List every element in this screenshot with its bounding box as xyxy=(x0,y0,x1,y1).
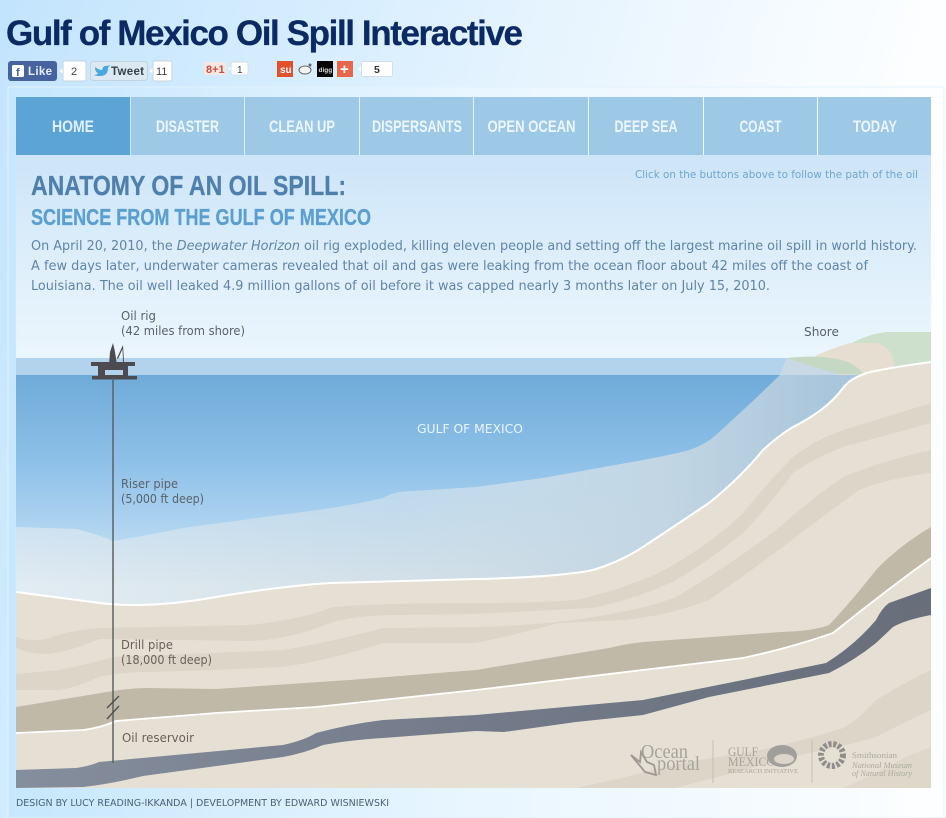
google plus button xyxy=(204,62,248,76)
google plus button: 1 xyxy=(237,65,243,76)
logo: ocean portal: portal xyxy=(657,753,700,775)
sharing icons and count: digg xyxy=(318,67,332,74)
footer credits: DESIGN BY LUCY READING-IKKANDA | DEVELOPMENT BY EDWARD WISNIEWSKI xyxy=(16,798,389,809)
intro sky panel xyxy=(16,155,931,360)
twitter tweet button: 11 xyxy=(156,66,167,78)
seafloor line xyxy=(16,362,931,605)
surface water band xyxy=(16,358,787,375)
oil reservoir layer xyxy=(16,588,931,788)
nav: disaster xyxy=(131,97,244,155)
nav: clean up xyxy=(245,97,359,155)
label: oil rig xyxy=(121,309,245,338)
bottom right sediment stratum xyxy=(843,747,931,788)
sharing icons and count: + xyxy=(340,61,349,78)
facebook like button: 2 xyxy=(71,66,77,78)
sharing icons and count xyxy=(277,61,392,78)
land: green spit xyxy=(787,357,864,375)
dark rock layer xyxy=(16,527,931,733)
facebook like button: Like xyxy=(28,66,52,78)
label: shore: Shore xyxy=(804,325,839,339)
intro paragraph: A few days later, underwater cameras revealed that oil and gas were leaking from the ocean floor about 42 miles off the coast of xyxy=(31,258,869,274)
logo: ocean portal xyxy=(631,741,700,775)
land: green hill xyxy=(850,332,931,372)
label: drill pipe xyxy=(121,638,212,667)
riser and drill pipe xyxy=(112,378,114,763)
logo: gulf of mexico research initiative xyxy=(728,745,798,775)
label: oil rig: (42 miles from shore) xyxy=(121,324,245,338)
intro paragraph: On April 20, 2010, the Deepwater Horizon oil rig exploded, killing eleven people and setting off the largest marine oil spill in world history. xyxy=(31,238,917,254)
pipe break marks xyxy=(107,696,119,719)
nav: home xyxy=(16,97,130,155)
nav: today: TODAY xyxy=(853,117,897,136)
subheading: SCIENCE FROM THE GULF OF MEXICO xyxy=(31,204,371,230)
continental shelf water overlay xyxy=(16,375,931,620)
nav: clean up: CLEAN UP xyxy=(269,117,335,136)
sharing icons and count: su xyxy=(280,65,292,76)
nav: today xyxy=(818,97,931,155)
label: oil reservoir: Oil reservoir xyxy=(122,731,194,745)
logo: gulf of mexico research initiative: MEXICO xyxy=(728,755,775,769)
upper sediment stratum xyxy=(16,403,931,654)
shelf water blue tint xyxy=(16,476,558,564)
nav: open ocean: OPEN OCEAN xyxy=(488,117,576,136)
logo: ocean portal: Ocean xyxy=(641,741,688,763)
instruction note: Click on the buttons above to follow the path of the oil xyxy=(635,169,918,181)
logo: gulf of mexico research initiative: GULF xyxy=(728,745,758,759)
label: riser pipe: Riser pipe xyxy=(121,477,178,491)
nav: coast xyxy=(704,97,817,155)
heading: anatomy of an oil spill: ANATOMY OF AN OIL SPILL: xyxy=(31,170,346,201)
title: Gulf of Mexico Oil Spill Interactive xyxy=(6,14,523,53)
logo: smithsonian: of Natural History xyxy=(852,768,912,778)
logo divider xyxy=(811,740,813,783)
nav: deep sea: DEEP SEA xyxy=(614,117,678,136)
nav: deep sea xyxy=(589,97,703,155)
nav: coast: COAST xyxy=(740,117,782,136)
twitter tweet button: Tweet xyxy=(111,66,144,78)
nav: disaster: DISASTER xyxy=(156,117,219,136)
shore shallows above sea level xyxy=(780,358,870,375)
twitter tweet button xyxy=(90,61,172,81)
cross-section diagram xyxy=(16,309,931,788)
land: tan hill xyxy=(815,343,895,376)
logo divider xyxy=(712,740,714,783)
logo: smithsonian: Smithsonian xyxy=(852,750,898,760)
navigation bar xyxy=(16,97,931,155)
logo: smithsonian: National Museum xyxy=(851,760,912,770)
label: oil rig: Oil rig xyxy=(121,309,156,323)
second sediment stratum xyxy=(16,450,931,690)
intro paragraph xyxy=(31,238,917,294)
nav: home: HOME xyxy=(52,117,94,136)
seabed sediment xyxy=(16,362,931,788)
social sharing bar xyxy=(8,61,392,81)
facebook like button xyxy=(8,61,86,81)
google plus button: 8+1 xyxy=(206,64,225,76)
nav: dispersants: DISPERSANTS xyxy=(372,117,462,136)
nav: dispersants xyxy=(360,97,473,155)
logo: gulf of mexico research initiative: RESEARCH INITIATIVE xyxy=(728,769,798,775)
label: riser pipe: (5,000 ft deep) xyxy=(121,492,204,506)
lower right sediment stratum xyxy=(576,670,931,788)
sharing icons and count: 5 xyxy=(374,64,380,76)
label: drill pipe: Drill pipe xyxy=(121,638,173,652)
label: riser pipe xyxy=(121,477,204,506)
label: drill pipe: (18,000 ft deep) xyxy=(121,653,212,667)
logo: smithsonian xyxy=(821,744,912,778)
nav: open ocean xyxy=(474,97,588,155)
oil rig icon xyxy=(91,343,137,380)
label: gulf of mexico: GULF OF MEXICO xyxy=(417,422,523,436)
facebook like button: f xyxy=(16,67,20,79)
white line under dark rock layer xyxy=(16,558,931,733)
ocean water xyxy=(16,375,931,615)
intro paragraph: Louisiana. The oil well leaked 4.9 million gallons of oil before it was capped nearly 3 months later on July 15, 2010. xyxy=(31,278,770,294)
